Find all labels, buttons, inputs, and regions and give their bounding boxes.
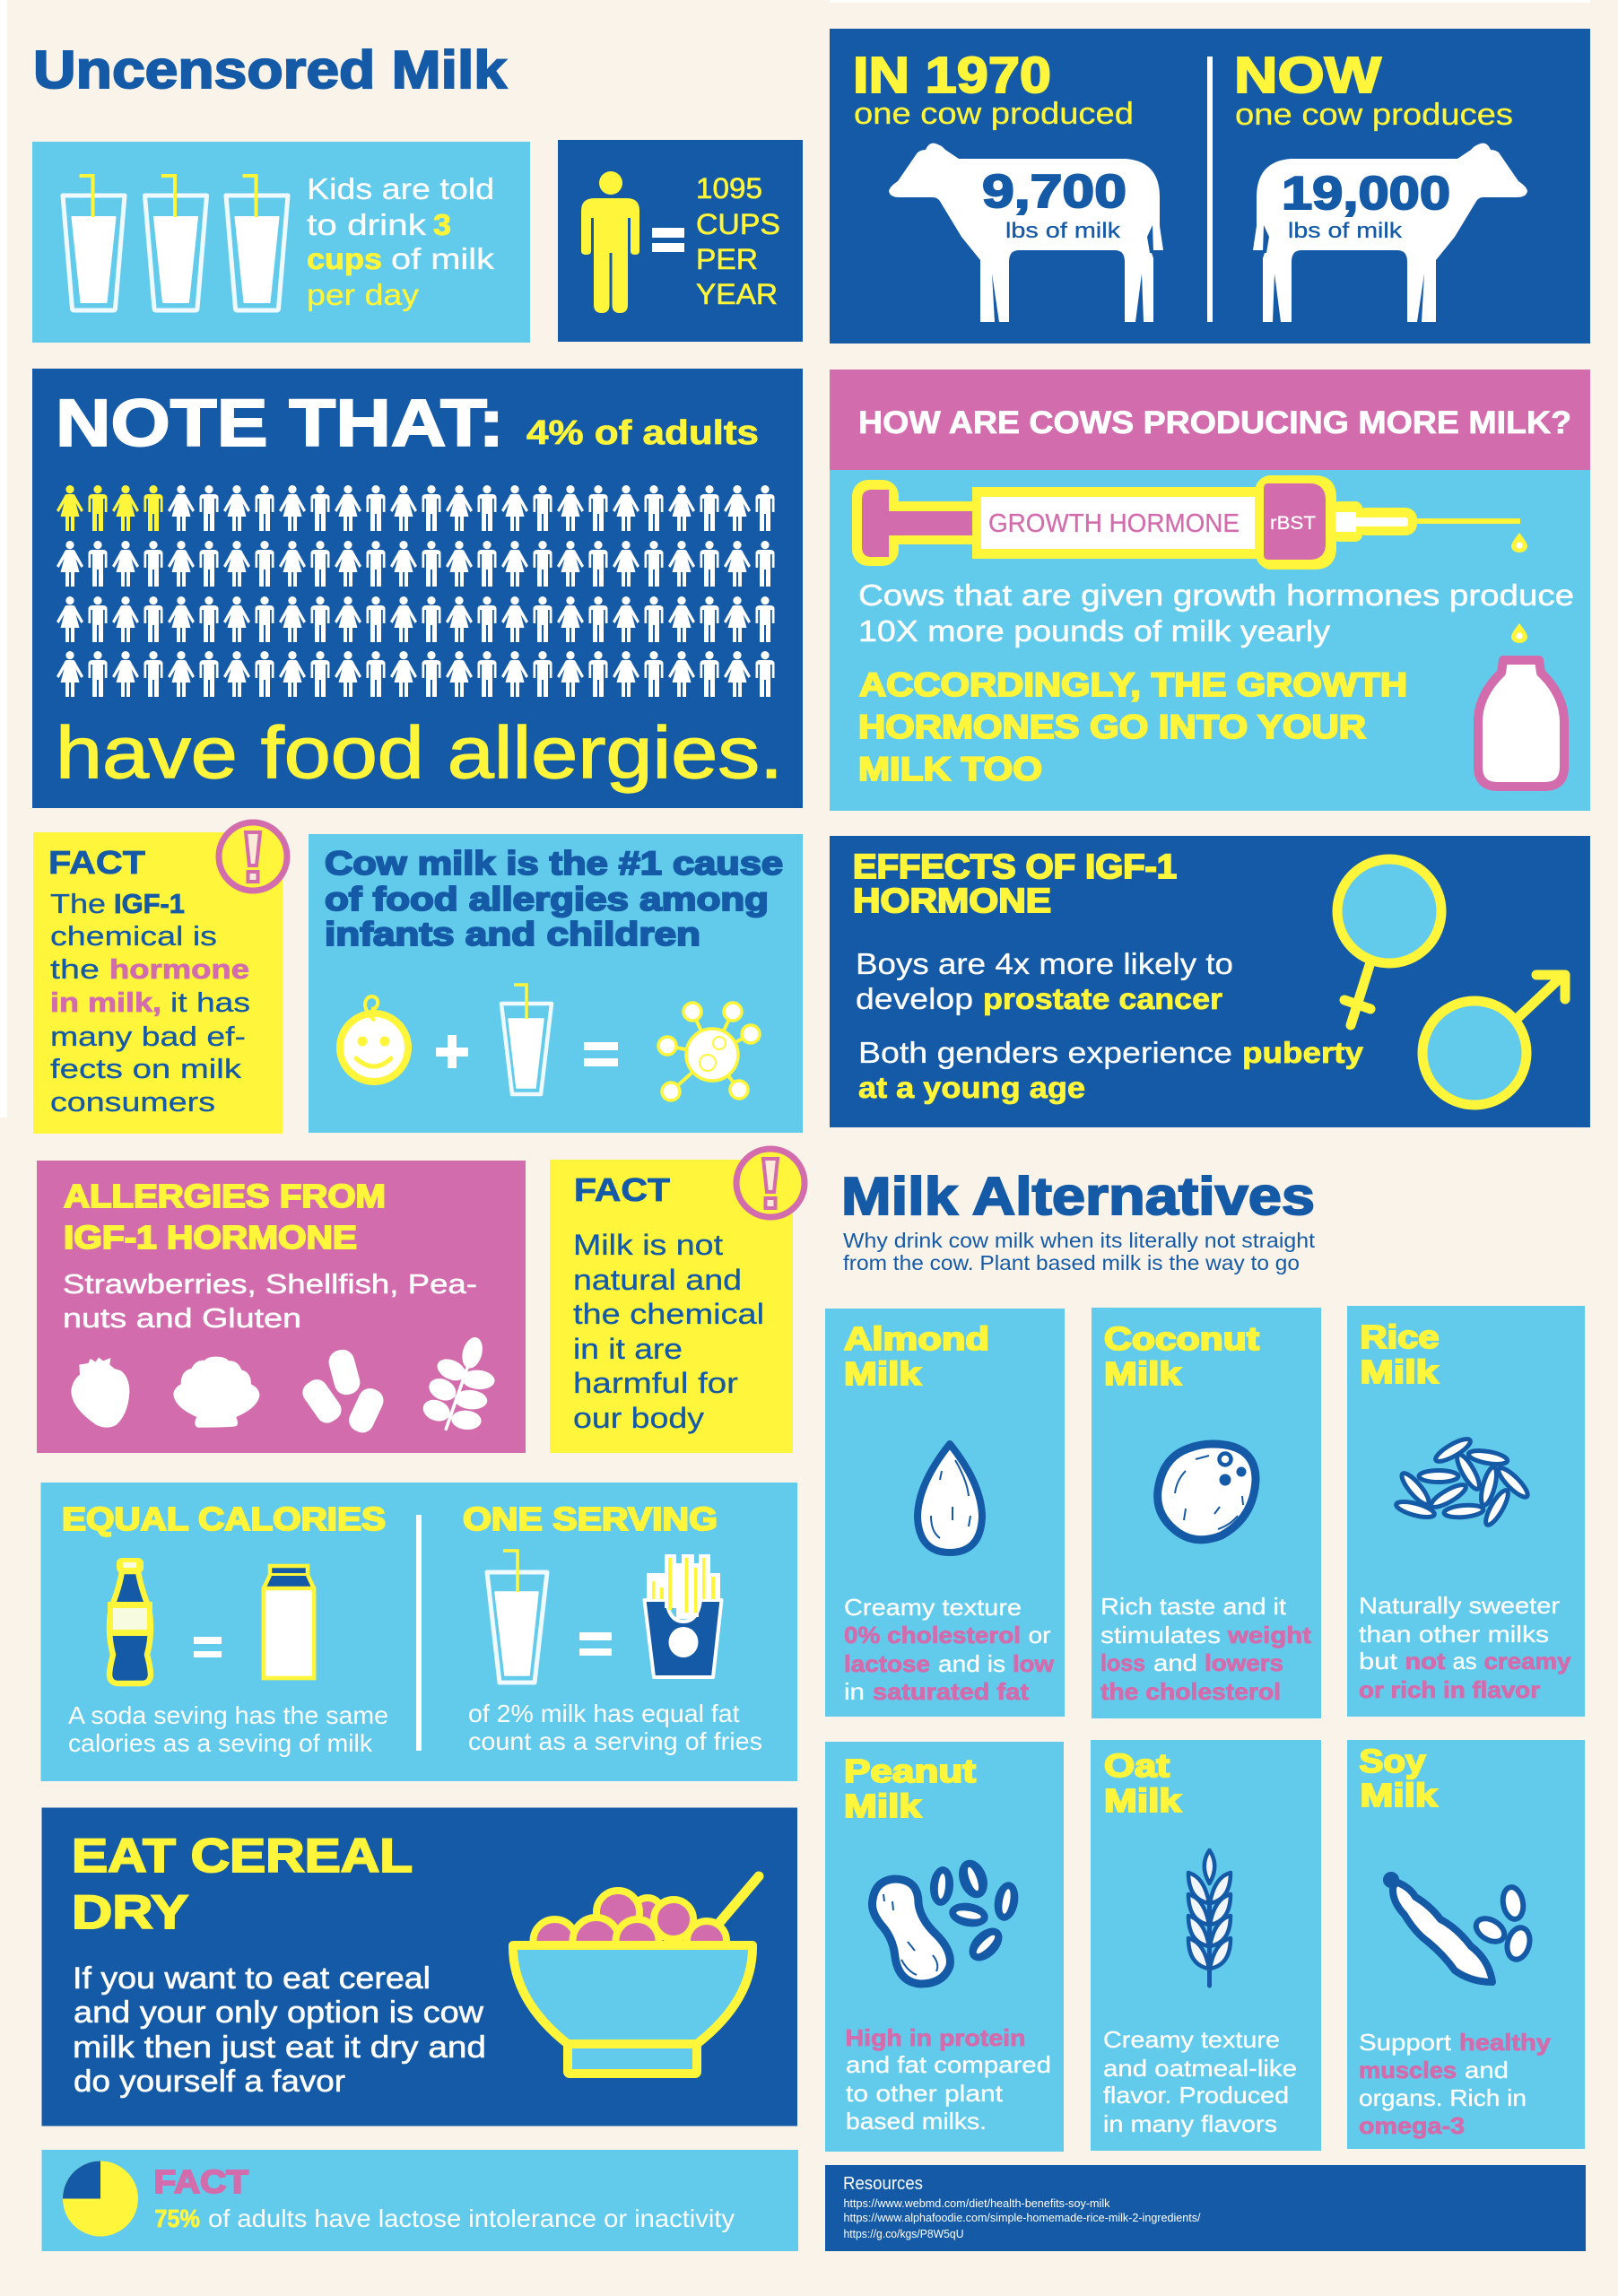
text: kids are told: per day — [307, 278, 420, 311]
panel: coconut milk — [1092, 1308, 1321, 1718]
text: oat milk: and oatmeal-like — [1103, 2055, 1297, 2082]
text: soda serving: A soda seving has the same — [68, 1701, 388, 1729]
text: IGF-1 chemical: fects on milk — [50, 1053, 242, 1084]
icon: soda bottle — [108, 1558, 152, 1683]
heading: almond milk: Almond — [844, 1320, 989, 1357]
panel: fact IGF-1 — [33, 822, 287, 1134]
icon: male symbol — [1422, 975, 1565, 1105]
icon: syringe: rBST — [1270, 513, 1316, 534]
panel: soy milk — [1347, 1740, 1585, 2149]
text: prostate cancer: develop — [856, 982, 973, 1015]
text: almond milk: 0% cholesterol — [844, 1622, 1021, 1648]
text: coconut milk: lowers — [1205, 1649, 1283, 1676]
heading: rice milk — [1360, 1318, 1440, 1390]
icon: peanuts — [299, 1347, 387, 1437]
heading: almond milk — [844, 1320, 989, 1392]
text: rice milk: not — [1405, 1648, 1446, 1674]
text: prostate cancer: Boys are 4x more likely to — [856, 947, 1233, 980]
icon: person — [581, 171, 639, 313]
panel: how are cows producing more milk — [830, 370, 1590, 811]
heading: note that: NOTE THAT: — [56, 386, 504, 460]
text: peanut milk: based milks. — [846, 2108, 987, 2135]
icon: rice grains — [1395, 1435, 1531, 1527]
panel: almond milk — [825, 1309, 1065, 1717]
icon: cereal bowl — [513, 1876, 759, 2074]
heading: resources: Resources — [843, 2174, 923, 2194]
icon: syringe: GROWTH HORMONE — [988, 509, 1240, 538]
heading: coconut milk: Coconut — [1104, 1320, 1259, 1357]
heading: peanut milk: Milk — [844, 1787, 922, 1824]
panel: equal calories and one serving — [41, 1483, 797, 1781]
heading: allergies: ALLERGIES FROM — [64, 1178, 386, 1214]
text: have food allergies: have food allergies. — [56, 712, 783, 794]
heading: soy milk — [1360, 1743, 1439, 1813]
panel: eat cereal dry — [41, 1808, 797, 2126]
text: rice milk: or rich in flavor — [1359, 1676, 1540, 1703]
text: soda serving — [68, 1701, 388, 1757]
text: soy milk: organs. Rich in — [1359, 2084, 1527, 2111]
heading: eat cereal dry — [72, 1830, 413, 1939]
panel: fact milk not natural — [550, 1149, 805, 1453]
text: milk not natural: harmful for — [573, 1367, 738, 1399]
text: soda serving: calories as a seving of milk — [68, 1729, 373, 1757]
heading: coconut milk: Milk — [1104, 1355, 1182, 1392]
icon: syringe — [852, 475, 1527, 570]
text: coconut milk: and — [1153, 1649, 1197, 1676]
text: almond milk: low — [1013, 1650, 1055, 1677]
text: kids are told: to drink — [307, 208, 427, 241]
heading: one serving: ONE SERVING — [463, 1500, 718, 1537]
text: oat milk: flavor. Produced — [1103, 2082, 1289, 2109]
text: cereal advice — [73, 1961, 486, 2099]
heading: fact: FACT — [154, 2163, 248, 2200]
icon: strawberry — [71, 1357, 129, 1428]
number: 9,700: 9,700 — [982, 166, 1127, 218]
text: IGF-1 chemical: consumers — [50, 1086, 215, 1118]
text: 1095 cups per year: 1095 — [696, 172, 762, 204]
icon: wheat — [1188, 1850, 1231, 1986]
text: rice milk: Naturally sweeter — [1359, 1592, 1560, 1619]
icon: milk carton — [264, 1566, 314, 1678]
text: cereal advice: milk then just eat it dry and — [73, 2031, 486, 2065]
text: IGF-1 chemical: in milk, — [50, 987, 161, 1018]
heading: allergies: IGF-1 HORMONE — [64, 1219, 357, 1256]
heading: oat milk: Milk — [1104, 1782, 1182, 1819]
text: peanut milk: and fat compared — [846, 2051, 1051, 2078]
heading: rice milk: Milk — [1360, 1353, 1440, 1390]
text: allergens — [63, 1268, 477, 1334]
icon: female symbol — [1337, 859, 1441, 1025]
panel: 1095 cups per year — [558, 140, 803, 342]
text: puberty: at a young age — [858, 1071, 1085, 1104]
heading: oat milk — [1104, 1747, 1182, 1819]
icon: baby — [340, 996, 408, 1082]
text: oat milk: in many flavors — [1103, 2110, 1277, 2137]
text: 1095 cups per year: YEAR — [696, 278, 778, 310]
text: lactose intolerance: 75% — [154, 2205, 200, 2232]
text: coconut milk: the cholesterol — [1100, 1678, 1281, 1705]
heading: in 1970: IN 1970 — [853, 47, 1051, 104]
text: rice milk: creamy — [1483, 1648, 1571, 1674]
text: oat milk — [1103, 2026, 1297, 2137]
text: milk not natural: natural and — [573, 1264, 742, 1296]
text: peanut milk: to other plant — [846, 2080, 1004, 2107]
text: coconut milk: weight — [1227, 1622, 1311, 1648]
panel: lactose fact — [41, 2150, 798, 2251]
text: 2% milk: count as a serving of fries — [468, 1727, 762, 1755]
text: IGF-1 chemical — [50, 888, 250, 1118]
text: puberty: Both genders experience — [858, 1036, 1232, 1069]
heading: coconut milk — [1104, 1320, 1259, 1392]
text: oat milk: Creamy texture — [1103, 2026, 1280, 2053]
panel: number one cause — [309, 834, 803, 1133]
heading: eat cereal dry: DRY — [72, 1886, 188, 1939]
icon: shellfish — [173, 1357, 259, 1428]
text: IGF-1 chemical: the — [50, 953, 100, 985]
text: resource links — [843, 2196, 1201, 2240]
icon: milk bottle — [1478, 660, 1564, 787]
text: one cow produced: one cow produced — [854, 97, 1134, 131]
text: coconut milk: Rich taste and it — [1100, 1593, 1287, 1620]
label: lbs of milk: lbs of milk — [1005, 219, 1121, 243]
text: prostate cancer: prostate cancer — [983, 982, 1222, 1015]
text: allergens: nuts and Gluten — [63, 1302, 301, 1334]
text: soy milk: and — [1465, 2057, 1509, 2083]
panel: oat milk — [1091, 1740, 1321, 2151]
text: IGF-1 chemical: The — [50, 888, 106, 919]
heading: milk alternatives: Milk Alternatives — [841, 1167, 1315, 1226]
heading: eat cereal dry: EAT CEREAL — [72, 1830, 413, 1883]
heading: almond milk: Milk — [844, 1355, 922, 1392]
text: kids are told — [307, 172, 495, 311]
text: rice milk: than other milks — [1359, 1621, 1549, 1648]
heading band — [830, 370, 1590, 470]
text: cereal advice: and your only option is cow — [74, 1996, 483, 2030]
heading: soy milk: Soy — [1360, 1743, 1426, 1779]
panel: peanut milk — [825, 1742, 1064, 2152]
text: soy milk — [1359, 2029, 1552, 2139]
text: almond milk: Creamy texture — [844, 1594, 1022, 1621]
text: almond milk: saturated fat — [873, 1678, 1029, 1705]
icon: equals — [584, 1042, 618, 1066]
text: peanut milk: High in protein — [845, 2024, 1026, 2051]
text: rice milk: as — [1453, 1648, 1476, 1674]
text: milk not natural — [573, 1229, 764, 1434]
chart: 75 percent pie — [63, 2161, 138, 2237]
text: puberty — [858, 1036, 1364, 1104]
text: lactose intolerance: of adults have lactose intolerance or inactivity — [208, 2205, 735, 2232]
icon: plus — [436, 1035, 468, 1068]
heading: cow milk: infants and children — [325, 916, 700, 952]
heading: rice milk: Rice — [1360, 1318, 1439, 1355]
text: kids are told: Kids are told — [307, 172, 494, 205]
icon: three milk glasses — [63, 176, 288, 310]
text: resource links: https://www.alphafoodie.com/simple-homemade-rice-milk-2-ingredients/ — [843, 2211, 1201, 2224]
text: 1095 cups per year: PER — [696, 243, 758, 275]
panel: resources — [825, 2165, 1586, 2251]
text: IGF-1 chemical: chemical is — [50, 920, 217, 952]
heading: peanut milk — [844, 1752, 976, 1824]
text: accordingly: HORMONES GO INTO YOUR — [858, 709, 1366, 745]
icon: falling drop — [1511, 623, 1527, 643]
title: Uncensored Milk — [33, 40, 507, 100]
text: IGF-1 chemical: IGF-1 — [114, 888, 185, 919]
text: cows given hormones — [858, 578, 1574, 648]
text: almond milk: and is — [938, 1650, 1005, 1677]
heading: allergies — [64, 1178, 386, 1256]
text: 2% milk: of 2% milk has equal fat — [468, 1700, 740, 1727]
panel: three cups per day — [32, 142, 530, 343]
text: milk not natural: Milk is not — [573, 1229, 723, 1261]
icon: alert — [736, 1149, 805, 1217]
icon: almond — [918, 1444, 982, 1552]
panel: rice milk — [1347, 1306, 1585, 1717]
heading: cow milk — [325, 845, 783, 952]
number: 19,000: 19,000 — [1282, 168, 1450, 220]
icon: cow 1970 — [889, 144, 1163, 322]
text: milk alternatives intro: from the cow. Plant based milk is the way to go — [843, 1251, 1300, 1274]
text: kids are told: cups — [307, 242, 382, 275]
icon: alert — [219, 822, 287, 891]
text: rice milk: but — [1359, 1648, 1398, 1674]
icon: equals — [652, 228, 684, 252]
heading band: HOW ARE COWS PRODUCING MORE MILK? — [858, 405, 1571, 440]
text: puberty: puberty — [1242, 1036, 1364, 1069]
heading: fact: FACT — [48, 844, 145, 881]
text: one cow produces: one cow produces — [1235, 98, 1513, 132]
text: 1095 cups per year: CUPS — [696, 208, 780, 240]
text: allergens: Strawberries, Shellfish, Pea- — [63, 1268, 477, 1300]
icon: milk glass — [487, 1551, 547, 1683]
heading: effects: HORMONE — [853, 883, 1051, 920]
text: prostate cancer — [856, 947, 1233, 1015]
text: soy milk: omega-3 — [1359, 2112, 1465, 2139]
text: almond milk — [844, 1594, 1055, 1705]
panel: note that — [32, 369, 803, 808]
icon: equals — [579, 1632, 612, 1656]
text: almond milk: or — [1028, 1622, 1051, 1648]
heading: effects — [853, 848, 1177, 920]
text: soy milk: muscles — [1359, 2057, 1457, 2083]
icon: coconut — [1158, 1444, 1256, 1540]
icon: cow now — [1253, 144, 1527, 322]
heading: soy milk: Milk — [1360, 1777, 1439, 1813]
heading: cow milk: of food allergies among — [325, 881, 769, 918]
text: milk not natural: in it are — [573, 1333, 683, 1365]
text: peanut milk — [845, 2024, 1051, 2135]
heading: oat milk: Oat — [1104, 1747, 1170, 1784]
heading: equal calories: EQUAL CALORIES — [62, 1500, 386, 1537]
text: IGF-1 chemical: many bad ef- — [50, 1021, 246, 1052]
text: rice milk — [1359, 1592, 1571, 1703]
text: resource links: https://g.co/kgs/P8W5qU — [843, 2227, 963, 2240]
heading: cow milk: Cow milk is the #1 cause — [325, 845, 783, 882]
text: milk alternatives intro — [843, 1229, 1316, 1274]
text: accordingly — [858, 666, 1407, 787]
text: accordingly: ACCORDINGLY, THE GROWTH — [859, 666, 1407, 703]
text: milk alternatives intro: Why drink cow milk when its literally not straight — [843, 1229, 1316, 1252]
text: IGF-1 chemical: hormone — [109, 953, 249, 985]
panel: cow production comparison — [830, 29, 1590, 344]
text: kids are told: of milk — [391, 242, 495, 275]
text: accordingly: MILK TOO — [858, 751, 1042, 787]
text: milk not natural: our body — [573, 1402, 704, 1434]
text: soy milk: healthy — [1459, 2029, 1552, 2056]
text: milk not natural: the chemical — [573, 1298, 764, 1330]
text: 1095 cups per year — [696, 172, 780, 310]
icons: allergens — [71, 1335, 495, 1437]
icon: equals — [194, 1637, 222, 1657]
text: almond milk: in — [844, 1678, 865, 1705]
icon: fries — [644, 1554, 721, 1677]
heading: effects: EFFECTS OF IGF-1 — [853, 848, 1177, 886]
panel: effects of IGF-1 — [830, 836, 1590, 1127]
text: coconut milk — [1100, 1593, 1311, 1705]
chart: people pictogram — [54, 483, 775, 697]
text: 4% of adults: 4% of adults — [526, 414, 759, 452]
text: almond milk: lactose — [844, 1650, 930, 1677]
icon: germ — [658, 1003, 760, 1100]
heading: now: NOW — [1234, 47, 1381, 104]
icon: soybeans — [1386, 1874, 1533, 1982]
text: coconut milk: stimulates — [1100, 1622, 1221, 1648]
text: resource links: https://www.webmd.com/diet/health-benefits-soy-milk — [843, 2196, 1110, 2210]
heading: peanut milk: Peanut — [844, 1752, 976, 1789]
text: soy milk: Support — [1359, 2029, 1452, 2056]
text: 2% milk — [468, 1700, 762, 1755]
icon: gluten leaf — [420, 1335, 495, 1431]
text: kids are told: 3 — [433, 208, 451, 241]
icon: peanuts — [872, 1856, 1022, 1984]
label: lbs of milk: lbs of milk — [1288, 219, 1403, 243]
text: cereal advice: If you want to eat cereal — [73, 1961, 431, 1996]
text: cows given hormones: 10X more pounds of milk yearly — [858, 614, 1331, 648]
heading: fact: FACT — [574, 1171, 670, 1208]
text: cows given hormones: Cows that are given growth hormones produce — [858, 578, 1574, 612]
icon: milk glass — [501, 985, 552, 1094]
text: coconut milk: loss — [1100, 1649, 1145, 1676]
panel: allergies from IGF-1 — [37, 1161, 526, 1453]
text: IGF-1 chemical: it has — [170, 987, 250, 1018]
text: cereal advice: do yourself a favor — [74, 2065, 345, 2099]
